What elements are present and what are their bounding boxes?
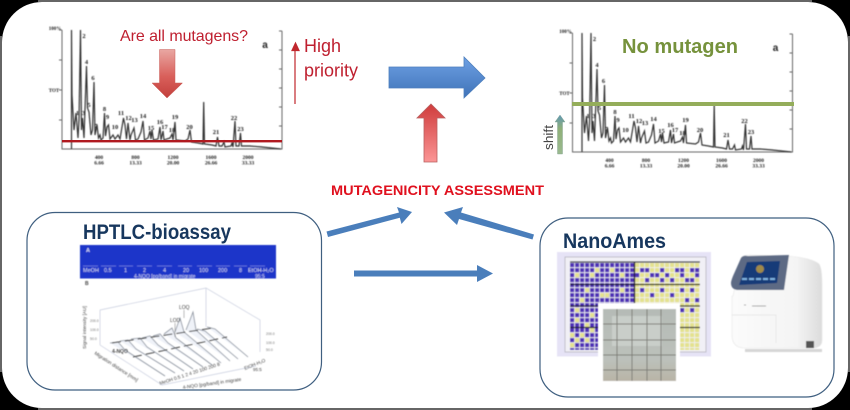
peak labels: 7 [94,123,98,130]
blue plate image: 20 [183,268,189,274]
3D densitogram: 100.0 [266,341,275,345]
peak labels [49,27,268,166]
3D densitogram: 95:5 [253,367,262,372]
peak labels: 13.33 [129,160,142,166]
blue plate image: 4-NQO [pg/band] in migrate [134,274,196,280]
blue plate image: 0.5 [104,268,112,274]
heading: mutagenicity assessment: MUTAGENICITY ASSESSMENT [331,182,544,198]
blue plate image: 8 [239,268,242,274]
spectrum trace [582,33,792,152]
question: are all mutagens: Are all mutagens? [120,28,248,45]
3D densitogram: Signal intensity [AU] [82,306,88,349]
3D densitogram: 200.0 [90,319,99,323]
peak labels: 15 [148,125,155,132]
peak labels: 17 [672,127,679,134]
peak labels: 7 [605,126,609,133]
panel: NanoAmes [540,218,834,397]
3D densitogram: 100.0 [90,328,99,332]
blue plate image: 200 [218,268,227,274]
peak labels: a [773,43,779,54]
peak labels: 1200 [678,158,689,164]
blue plate image: 100 [199,268,208,274]
peak labels: 5 [87,102,91,109]
peak labels [559,30,779,170]
peak labels: 9 [106,114,110,121]
peak labels: 11 [118,110,124,117]
peak labels: 20.00 [677,164,690,170]
well plate [557,252,711,356]
peak labels: 26.66 [715,164,728,170]
peak labels: 6 [91,75,95,82]
threshold line: green [572,102,794,106]
peak labels: 19 [172,114,179,121]
3D densitogram: B [85,281,89,287]
peak labels: 14 [140,113,147,120]
peak labels: 2 [82,33,86,40]
peak labels: 14 [650,116,658,123]
peak labels: 3 [82,110,86,117]
peak labels: 22 [741,118,748,125]
peak labels: 100% [559,30,572,35]
peak labels: 20 [697,127,703,134]
peak labels: 23 [748,129,755,136]
peak labels: 6.66 [94,160,104,166]
peak labels: 3 [592,113,596,120]
axes [59,30,282,149]
peak labels: 1200 [168,155,179,161]
axes [570,33,792,152]
peak labels: 21 [213,129,219,136]
peak labels: 800 [131,155,140,161]
label: high priority: High [304,36,341,56]
peak labels: 8 [613,109,617,116]
peak labels: 2 [593,36,596,43]
blue plate image: 4 [163,268,166,274]
panel frame [27,212,322,390]
peak labels: 6.66 [605,164,615,170]
peak labels: 21 [723,132,730,139]
peak labels: 13.33 [640,164,652,170]
peak labels: 1600 [206,155,217,161]
peak labels: 12 [125,115,132,122]
peak labels: 20 [186,124,193,131]
peak labels: 17 [161,124,168,131]
3D densitogram [82,281,275,391]
blue plate image: 95:5 [255,274,265,280]
arrow: HPTLC to assessment [326,207,412,237]
peak labels: 2000 [242,155,254,161]
peak labels: 33.33 [752,164,765,170]
peak labels: 8 [103,106,107,113]
peak labels: 26.66 [205,160,217,166]
chromatogram: high priority [49,27,282,166]
arrow: red down [152,50,182,98]
sequencer instrument [731,255,822,352]
arrow: HPTLC to NanoAmes [354,265,493,282]
peak labels: 18 [679,130,686,137]
peak labels: 19 [682,117,690,124]
blue plate image: MeOH [83,268,99,274]
peak labels: 15 [658,128,666,135]
arrow: NanoAmes to assessment [444,207,534,240]
peak labels: TOT [49,89,60,94]
peak labels: 4 [595,62,599,69]
peak labels: 400 [605,158,614,164]
peak labels: 4 [85,59,89,66]
panel: HPTLC-bioassay [27,212,322,391]
panel heading: NanoAmes [563,229,666,253]
peak labels: 12 [636,118,642,125]
peak labels: a [262,40,268,51]
arrow: red up from assessment [417,104,445,162]
3D densitogram: MeOH 0.5 1 2 4 20 100 200 8 [159,362,221,387]
3D densitogram: LOQ [179,305,190,311]
peak labels: TOT [559,92,570,97]
peak labels: 23 [237,126,244,133]
3D densitogram: 50.0 [266,348,273,352]
peak labels: 10 [112,124,118,131]
arrow: shift up [555,115,565,154]
panel frame [540,218,834,397]
peak labels: 33.33 [242,160,254,166]
peak labels: 2000 [753,158,764,164]
peak labels: 6 [602,78,606,85]
spectrum trace [72,30,281,149]
blue plate image: 1 [124,268,127,274]
peak labels: 400 [95,155,103,161]
3D densitogram: EtOH-H₂O [244,358,267,372]
blue plate image: A [86,248,90,254]
peak labels: 13 [642,120,649,127]
label: high priority: priority [304,60,358,80]
blue plate image: 2 [143,268,146,274]
threshold line: red [62,140,282,142]
label: no mutagen: No mutagen [622,36,738,58]
3D densitogram: 4-NQO [pg/band] in migrate [182,377,242,391]
arrow: thin red up [292,43,299,104]
agar plate photo [598,303,680,382]
peak labels: 1 [76,110,79,117]
label: shift: shift [541,125,556,150]
peak labels: 9 [616,117,620,124]
panel heading: HPTLC-bioassay [83,220,231,244]
peak labels: 1600 [716,158,727,164]
peak labels: 11 [628,113,635,120]
peak labels: 5 [598,105,602,112]
peak labels: 20.00 [167,160,179,166]
peak labels: 1 [586,113,590,120]
peak labels: 800 [642,158,650,164]
chromatogram: no mutagen [559,30,792,170]
3D densitogram: 4-NQO [112,349,128,355]
peak labels: 16 [157,119,164,126]
peak labels: 22 [231,115,237,122]
blue plate image: EtOH-H₂O [248,268,274,274]
peak labels: 16 [667,122,674,129]
peak labels: 100% [49,27,61,32]
3D densitogram: 200.0 [266,332,275,336]
arrow: large blue right [389,57,485,98]
3D densitogram: 50.0 [90,337,97,341]
peak labels: 18 [169,127,176,134]
peak labels: 13 [131,117,138,124]
3D densitogram: LOD [170,318,181,324]
blue plate image [80,245,276,280]
3D densitogram: Migration distance [mm] [93,351,139,383]
peak labels: 10 [622,127,629,134]
